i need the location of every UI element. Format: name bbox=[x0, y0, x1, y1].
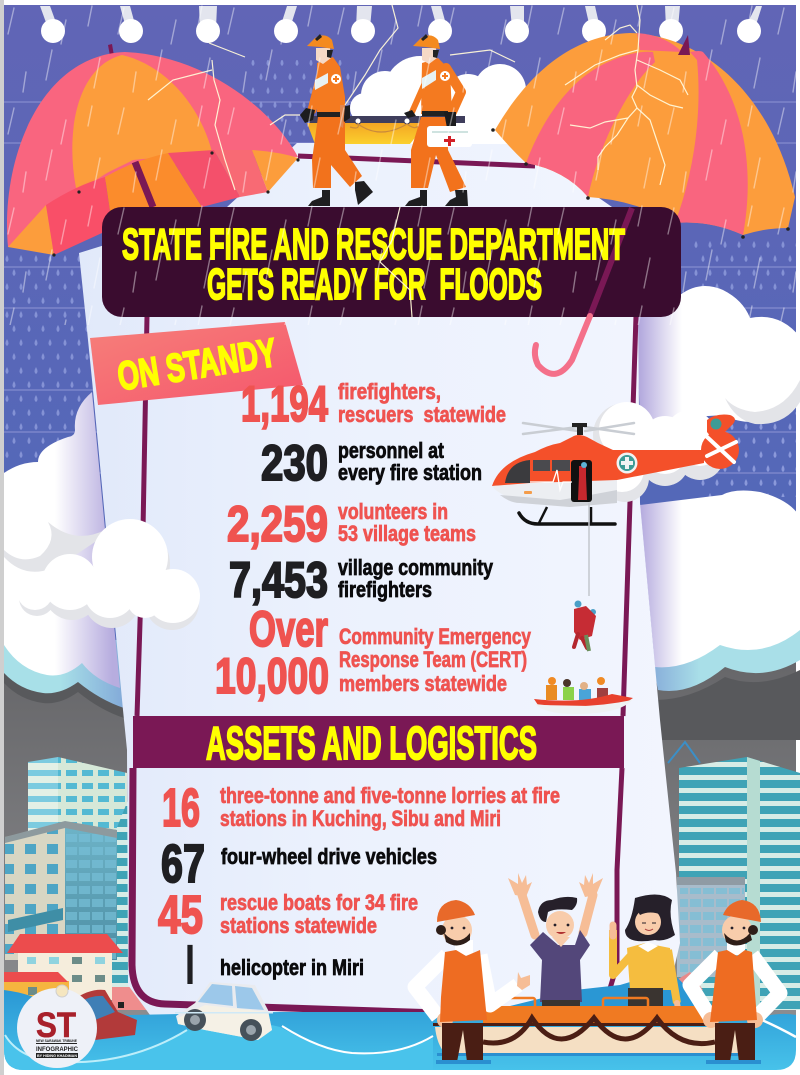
on standy tag bbox=[90, 322, 303, 405]
stat: 2,259 bbox=[227, 496, 476, 552]
right umbrella bbox=[491, 33, 795, 239]
title text: GETS READY FOR FLOODS bbox=[207, 260, 542, 309]
houses bbox=[4, 934, 157, 1010]
white car bbox=[175, 982, 273, 1041]
stretcher bbox=[307, 116, 465, 144]
cloud behind stretcher bbox=[350, 56, 526, 144]
small cloud on the left bbox=[17, 519, 200, 630]
stat: over 10,000: Community Emergency bbox=[339, 624, 532, 649]
stat: 45 boats: rescue boats for 34 fire bbox=[220, 890, 418, 915]
clouds: right bank bbox=[636, 286, 800, 740]
firefighter: right bbox=[404, 34, 472, 206]
stat: 230: personnel at bbox=[338, 438, 445, 463]
water bbox=[4, 990, 796, 1070]
binding rings bbox=[40, 6, 762, 43]
assets and logistics band: ASSETS AND LOGISTICS bbox=[206, 717, 537, 769]
lightning bolts bbox=[148, 5, 688, 317]
rope and winched rescuers bbox=[574, 503, 596, 651]
logo: ST infographic tag: INFOGRAPHIC bbox=[36, 1046, 78, 1053]
paper inner purple border bbox=[132, 156, 636, 1013]
man with raised arms bbox=[508, 873, 603, 1007]
clouds: left bank bbox=[4, 392, 124, 718]
stat: over 10,000: Response Team (CERT) bbox=[339, 647, 527, 672]
on standy tag: ON STANDY bbox=[115, 331, 280, 399]
firefighter: left bbox=[300, 34, 373, 206]
title text bbox=[122, 220, 625, 309]
stat: 1,194: rescuers statewide bbox=[338, 402, 506, 427]
paper sheet bbox=[79, 143, 680, 1015]
stat: over 10,000: members statewide bbox=[339, 671, 507, 696]
stat: 1 helicopter: I bbox=[186, 935, 194, 995]
stat: 230: 230 bbox=[261, 435, 328, 491]
stat: 7,453: 7,453 bbox=[229, 552, 328, 608]
stat: 7,453: firefighters bbox=[338, 577, 432, 602]
stat: 2,259: volunteers in bbox=[338, 499, 448, 524]
logo: ST infographic tag: BY HIDING KHADIMAN bbox=[37, 1053, 77, 1058]
rescuer right bbox=[690, 900, 780, 1064]
buildings: right towers bbox=[668, 742, 800, 1010]
helicopter bbox=[492, 415, 739, 524]
stat: 230: every fire station bbox=[338, 460, 482, 485]
stat: 230 bbox=[261, 435, 482, 491]
stat: 1 helicopter: helicopter in Miri bbox=[220, 955, 364, 980]
stat: 67 vehicles bbox=[161, 834, 437, 894]
stat: over 10,000 bbox=[215, 601, 532, 704]
red car bbox=[73, 990, 137, 1040]
cloud behind helicopter tail bbox=[593, 402, 724, 502]
logo: ST infographic tag: ST bbox=[36, 1006, 76, 1045]
title panel bbox=[102, 207, 681, 317]
stat: 16 lorries: 16 bbox=[162, 778, 200, 838]
stat: 7,453 bbox=[229, 552, 494, 608]
stat: 2,259: 2,259 bbox=[227, 496, 328, 552]
logo: ST infographic tag: NEW SARAWAK TRIBUNE bbox=[36, 1038, 77, 1043]
umbrella handle bbox=[535, 208, 632, 374]
stat: over 10,000: Over bbox=[249, 601, 328, 657]
buildings: left front tower bbox=[5, 821, 117, 960]
rain overlay bbox=[4, 5, 796, 325]
stat: 45 boats bbox=[158, 885, 418, 945]
stat: 1,194: firefighters, bbox=[338, 379, 441, 404]
stat: 1,194: 1,194 bbox=[241, 376, 328, 432]
stat: 1,194 bbox=[241, 376, 506, 432]
page margin bbox=[0, 0, 4, 1075]
stat: over 10,000: 10,000 bbox=[215, 648, 329, 704]
assets and logistics band bbox=[133, 716, 624, 769]
left umbrella bbox=[7, 44, 300, 257]
rescuer left bbox=[415, 900, 530, 1064]
stat: 7,453: village community bbox=[338, 555, 494, 580]
woman bbox=[613, 894, 680, 1020]
stat: 45 boats: stations statewide bbox=[220, 913, 377, 938]
stat: 16 lorries: three-tonne and five-tonne lorries at fire bbox=[220, 783, 560, 808]
stat: 16 lorries bbox=[162, 778, 560, 838]
stat: 67 vehicles: 67 bbox=[161, 834, 205, 894]
stat: 67 vehicles: four-wheel drive vehicles bbox=[221, 844, 437, 869]
backdrop behind boat passengers bbox=[510, 970, 705, 1006]
stat: 16 lorries: stations in Kuching, Sibu and Miri bbox=[220, 806, 501, 831]
stat: 1 helicopter bbox=[186, 935, 364, 995]
stat: 2,259: 53 village teams bbox=[338, 521, 476, 546]
buildings: left tall tower bbox=[28, 757, 148, 990]
rescue raft bbox=[534, 677, 633, 714]
rescue boat bbox=[433, 998, 742, 1056]
logo: ST infographic tag bbox=[17, 985, 97, 1068]
stat: 45 boats: 45 bbox=[158, 885, 203, 945]
